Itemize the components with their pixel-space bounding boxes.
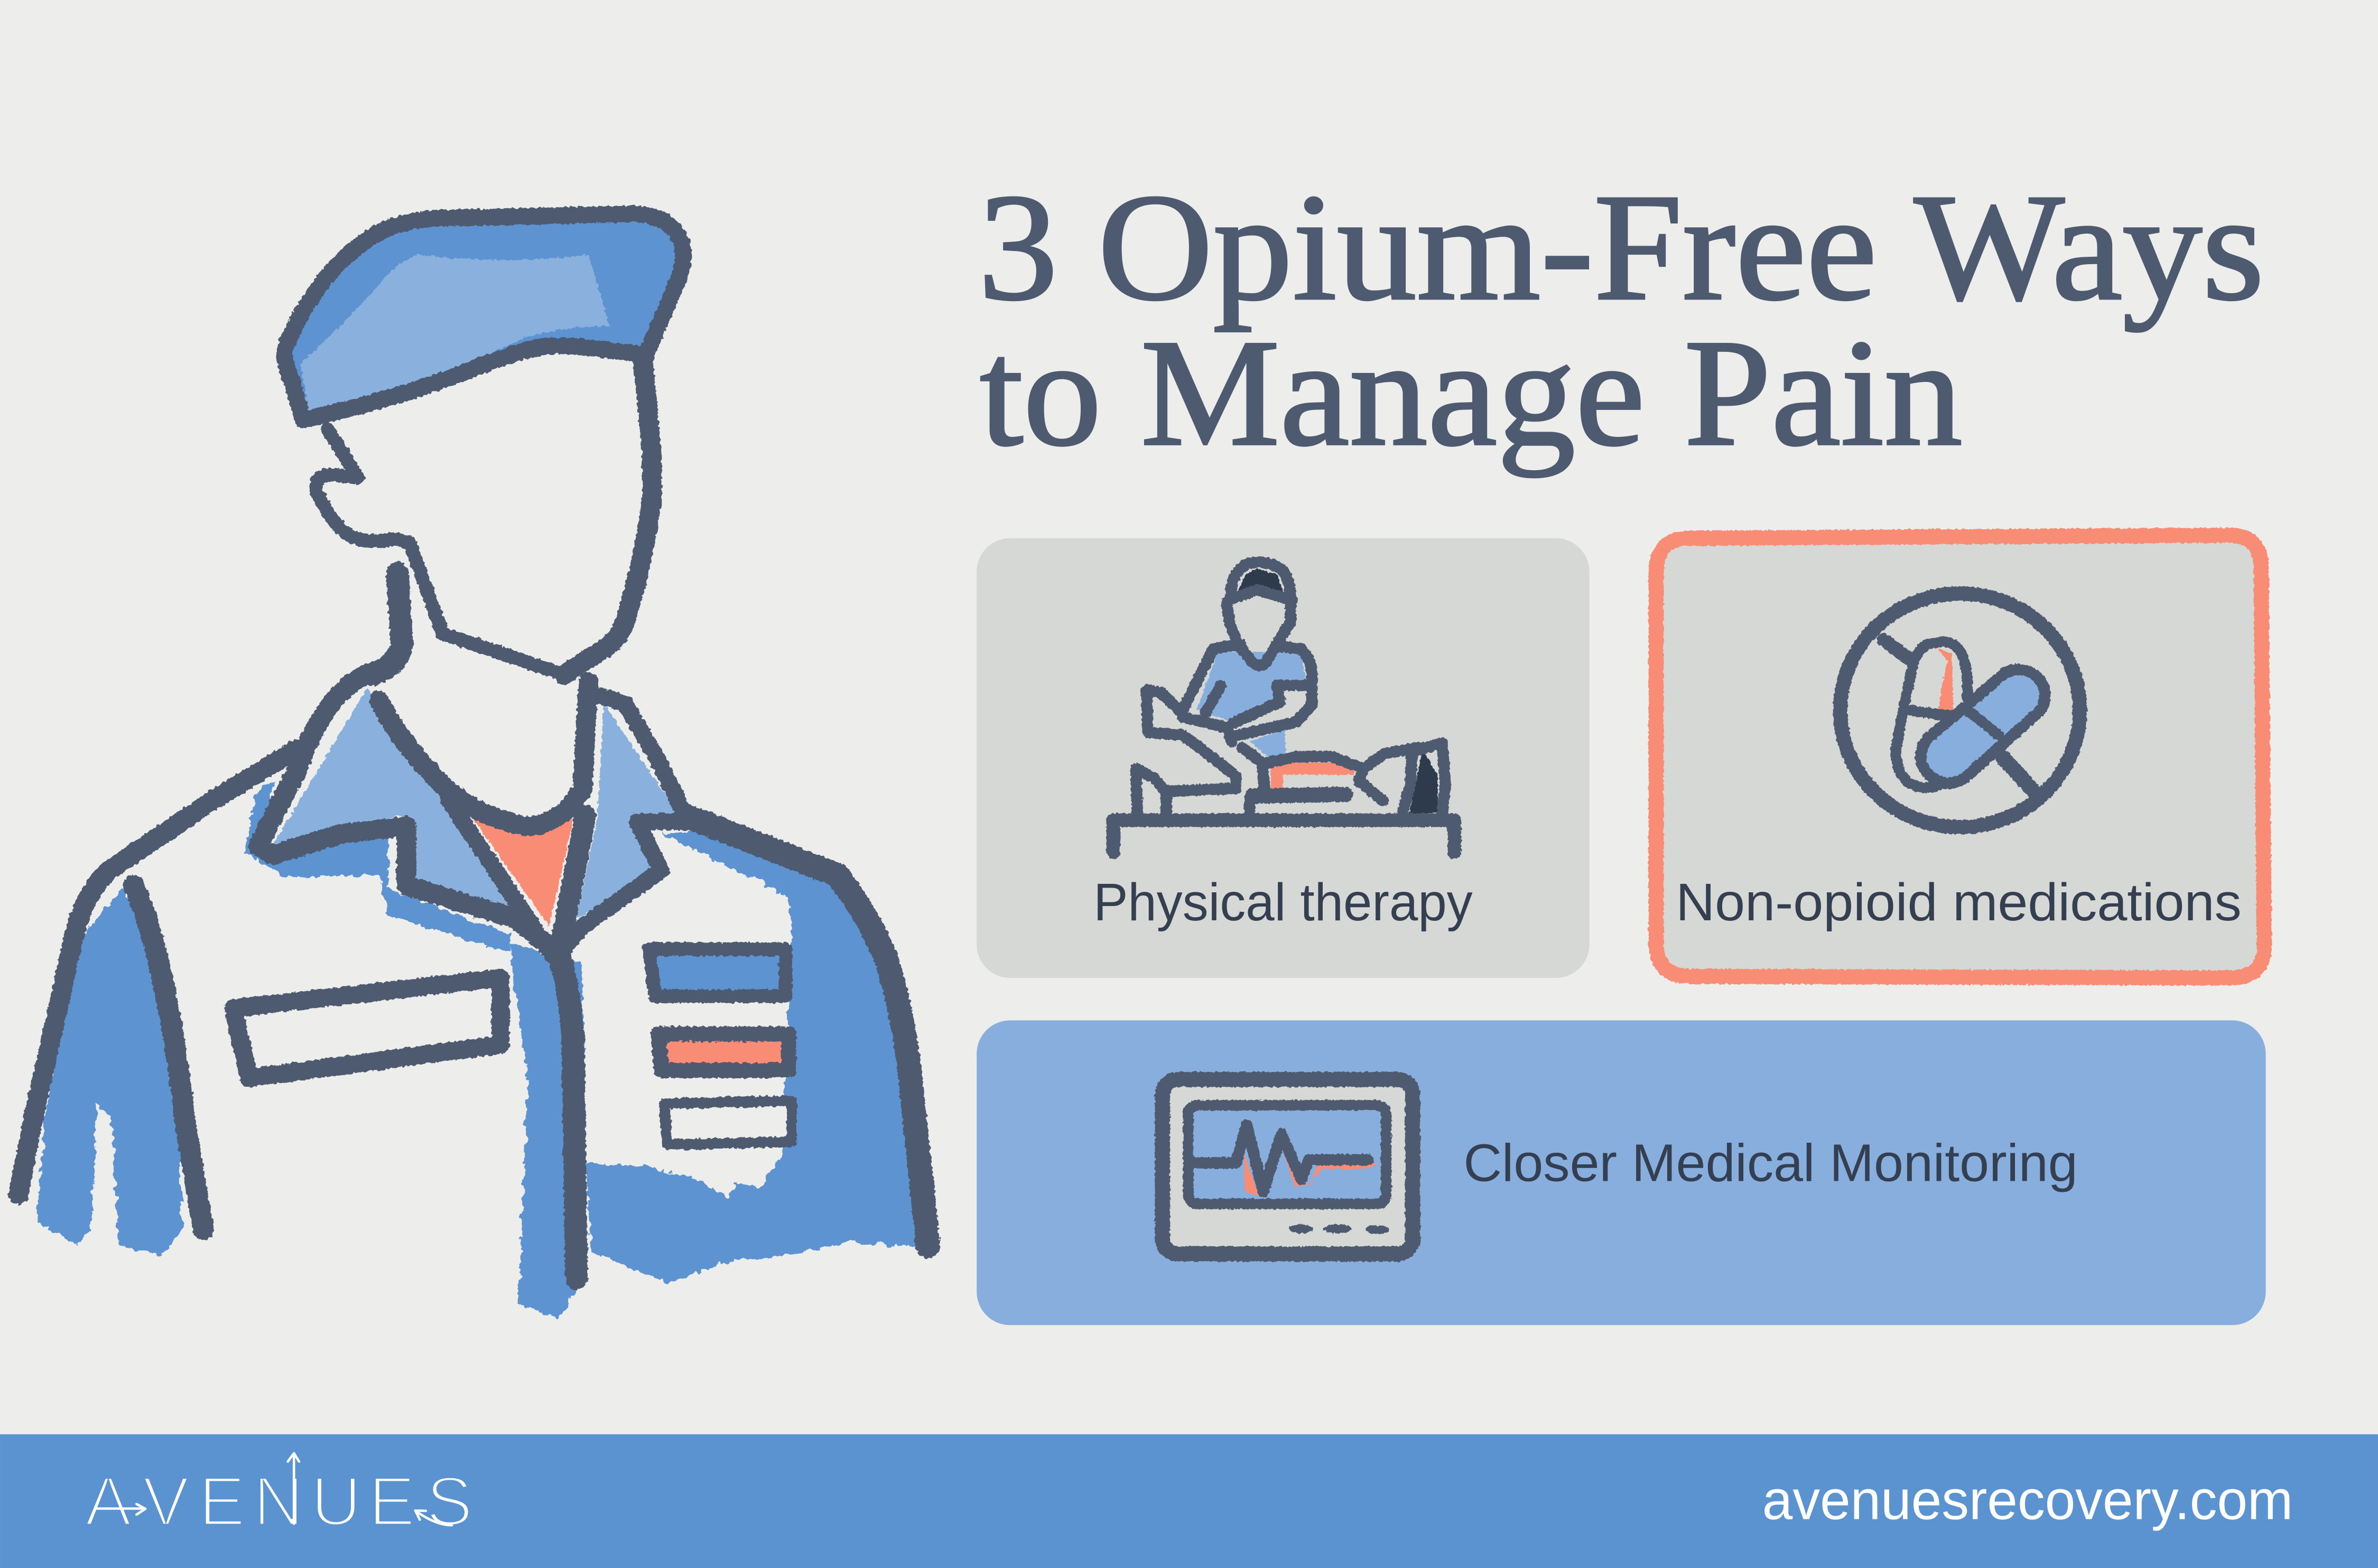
coral highlight border [1656,535,2264,978]
panel: closer medical monitoring [977,1020,2266,1325]
figure outlines [18,362,928,1278]
icon: therapist and patient [1113,562,1454,852]
panel: physical therapy [977,538,1590,978]
icon: heart monitor [1163,1079,1413,1254]
title: to Manage Pain [980,308,1963,478]
footer bar [0,1434,2378,1568]
illustration: uniformed officer [18,214,934,1319]
icon: crossed-out pills [1840,594,2080,827]
panel: non-opioid medications [1656,535,2264,978]
title: 3 Opium-Free Ways [978,162,2264,332]
chest badges and name tag [234,949,792,1145]
website url: avenuesrecovery.com [1762,1469,2293,1532]
label: physical therapy: Physical therapy [1093,873,1473,932]
collar and undershirt [273,688,680,926]
label: non-opioid medications: Non-opioid medications [1676,873,2242,932]
label: closer medical monitoring: Closer Medical Monitoring [1463,1134,2078,1193]
title [978,162,2264,478]
blue jacket fills [36,781,934,1319]
logo: avenues: AVENUES [85,1462,473,1540]
beret [284,214,683,420]
